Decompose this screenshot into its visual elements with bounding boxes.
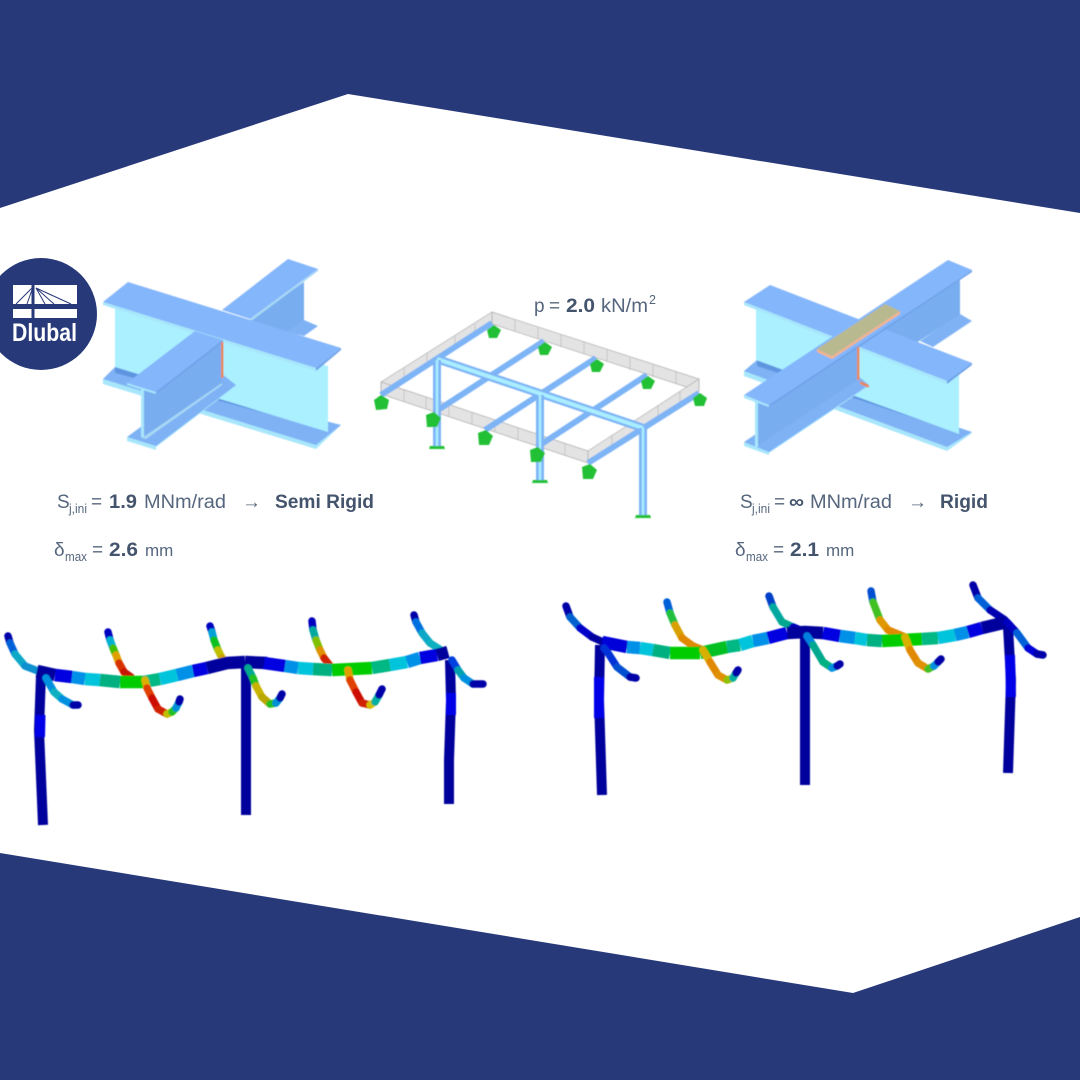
text: right stiffness: ∞ <box>789 492 804 513</box>
main beam <box>37 652 448 682</box>
main beam <box>437 359 643 428</box>
text: left stiffness: MNm/rad <box>144 492 226 513</box>
text: left deflection: max <box>65 550 88 564</box>
secondary beams top <box>566 585 1005 650</box>
diagram: frame with load <box>374 312 707 518</box>
diagram: rigid joint <box>744 260 972 455</box>
text: load: p <box>534 296 545 317</box>
chart: rigid deformation <box>566 585 1043 795</box>
text: right deflection: 2.1 <box>790 540 819 561</box>
secondary beams top <box>8 615 441 677</box>
diagram: semi rigid joint <box>103 259 341 450</box>
supports <box>374 325 707 518</box>
text: left deflection: mm <box>145 541 173 560</box>
text: right deflection: max <box>746 550 769 564</box>
text: left stiffness: = <box>91 492 102 513</box>
text: load: kN/m <box>601 296 648 317</box>
text: right deflection: mm <box>826 541 854 560</box>
main beam <box>602 622 1007 653</box>
text: left deflection: δ <box>54 540 65 561</box>
text: right stiffness: = <box>774 492 785 513</box>
text: load: 2 <box>649 293 656 307</box>
text: left stiffness: j,ini <box>68 502 87 516</box>
columns <box>437 360 643 515</box>
columns <box>599 627 1011 795</box>
text: right deflection: δ <box>735 540 746 561</box>
columns <box>39 660 451 825</box>
text: right stiffness: j,ini <box>751 502 770 516</box>
logo: Dlubal: Dlubal <box>12 319 77 347</box>
logo: Dlubal <box>0 258 97 370</box>
text: load <box>534 293 656 317</box>
text: right stiffness: S <box>740 492 753 513</box>
text: right stiffness: → <box>908 492 927 513</box>
text: load: 2.0 <box>566 296 595 317</box>
text: left deflection: = <box>92 540 103 561</box>
chart: semi rigid deformation <box>8 615 483 825</box>
text: right stiffness: Rigid <box>940 492 988 513</box>
text: right stiffness: MNm/rad <box>810 492 892 513</box>
secondary beams bottom <box>46 660 483 714</box>
text: right stiffness <box>740 492 988 516</box>
text: load: = <box>549 296 560 317</box>
secondary beams bottom <box>604 622 1043 680</box>
secondary beams <box>381 323 699 463</box>
text: left stiffness: 1.9 <box>109 492 137 513</box>
text: right deflection <box>735 540 854 564</box>
text: left stiffness: → <box>242 492 261 513</box>
plate <box>817 311 900 359</box>
text: left stiffness: S <box>57 492 70 513</box>
text: left deflection: 2.6 <box>109 540 138 561</box>
load walls <box>381 312 699 463</box>
text: right deflection: = <box>773 540 784 561</box>
text: left stiffness <box>57 492 374 516</box>
text: left deflection <box>54 540 173 564</box>
text: left stiffness: Semi Rigid <box>275 492 374 513</box>
